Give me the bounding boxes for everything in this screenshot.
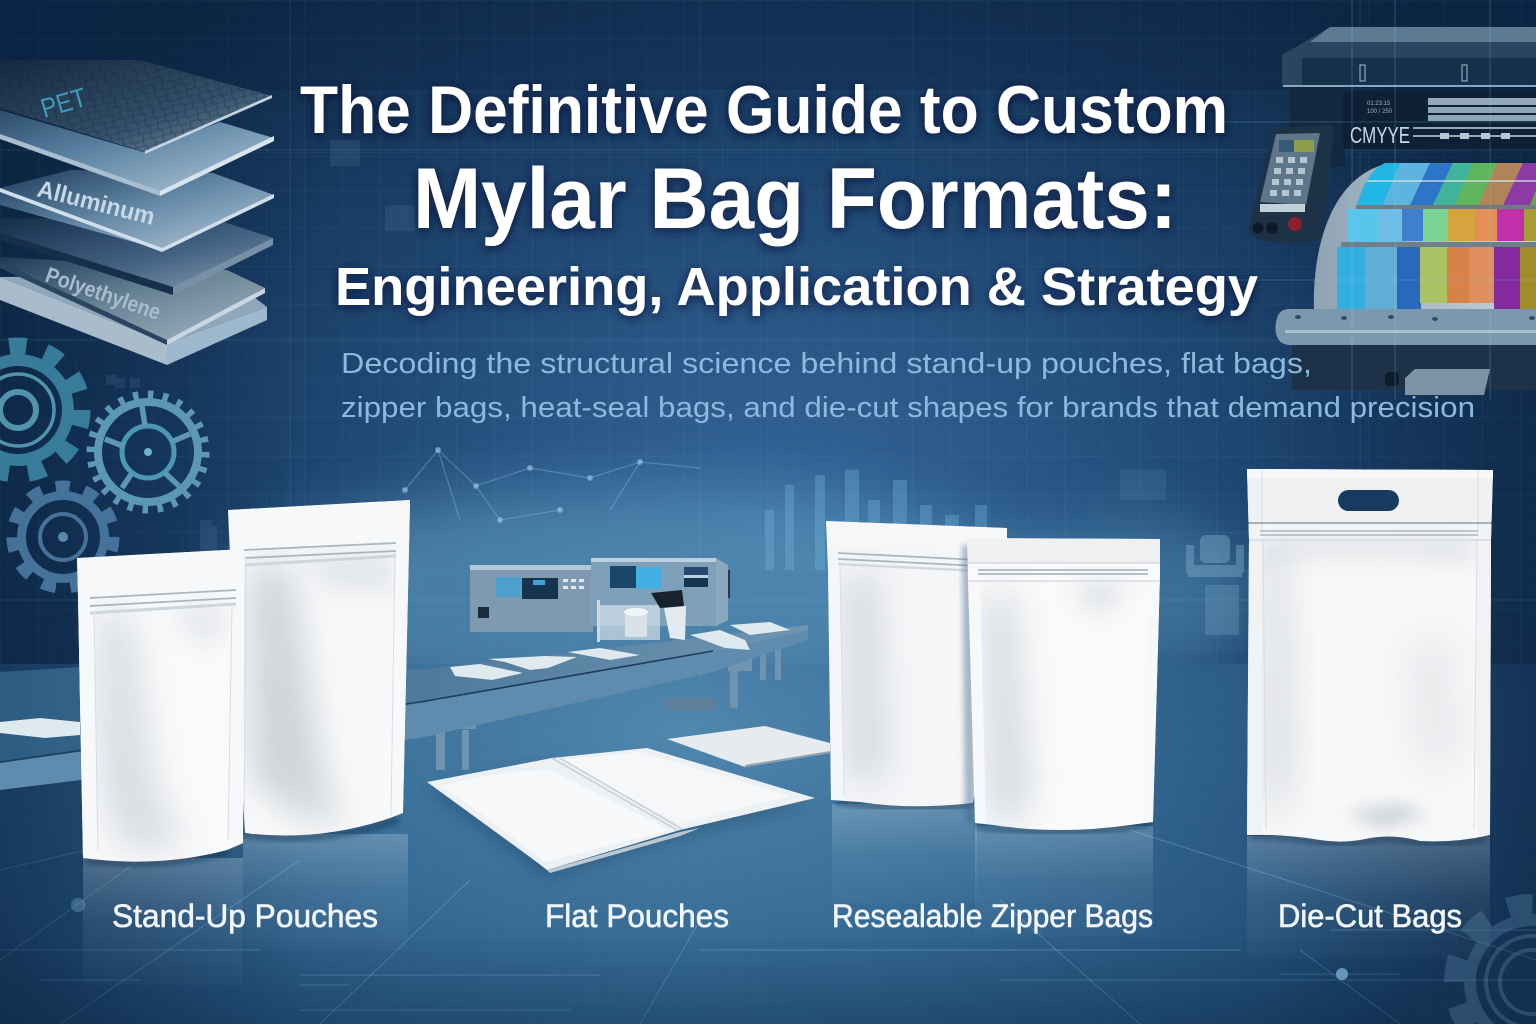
gear: spoked — [91, 395, 205, 509]
front open flat pouch — [427, 748, 815, 873]
title: The Definitive Guide to Custom — [300, 72, 1228, 148]
decorative data network — [402, 448, 700, 522]
production line machine — [0, 558, 808, 790]
handle hole — [1338, 490, 1399, 511]
stand-up pouches — [75, 495, 415, 985]
gears — [0, 346, 205, 587]
clear layer — [0, 110, 274, 196]
color drum — [1314, 163, 1536, 310]
CMYK panel: 01:23:15 — [1367, 101, 1391, 107]
front zipper bag — [960, 535, 1165, 832]
subtitle: zipper bags, heat-seal bags, and die-cut shapes for brands that demand precision — [341, 392, 1475, 424]
polyethylene layer: Polyethylene — [42, 262, 164, 325]
gear: lower — [13, 487, 113, 587]
handheld controller — [1248, 125, 1334, 244]
small stand-up pouch — [75, 545, 247, 865]
title: Engineering, Application & Strategy — [335, 257, 1258, 317]
aluminum layer — [0, 170, 274, 252]
flat pouches — [427, 726, 830, 878]
machine body left — [470, 565, 593, 632]
CMYK panel: CMYYE — [1350, 122, 1410, 148]
PET layer: PET — [37, 82, 90, 124]
pouches on conveyor — [0, 622, 790, 738]
resealable zipper bags — [822, 515, 1165, 936]
title: Mylar Bag Formats: — [413, 151, 1177, 247]
CMYK panel: 100 / 250 — [1367, 109, 1393, 115]
faint bar chart — [765, 470, 987, 570]
aluminum layer: Alluminum — [35, 176, 158, 231]
faint robot icon — [1186, 535, 1244, 635]
large stand-up pouch — [225, 495, 415, 840]
die-cut bag — [1240, 465, 1498, 959]
gear: large — [0, 346, 82, 474]
corner decorative gear — [1454, 904, 1536, 1024]
label: flat pouches: Flat Pouches — [545, 898, 729, 934]
press hood — [1282, 27, 1536, 167]
machine body right — [591, 558, 730, 626]
bag format labels — [112, 898, 1462, 934]
label: die-cut bags: Die-Cut Bags — [1278, 898, 1462, 934]
PET layer — [0, 60, 272, 154]
base layer — [0, 275, 267, 365]
title — [300, 72, 1258, 317]
printing press — [1220, 0, 1536, 400]
rear zipper bag — [822, 515, 1012, 810]
die-cut reflection — [1247, 836, 1490, 959]
label: resealable zipper bags: Resealable Zipper Bags — [832, 898, 1153, 934]
dark layer — [0, 218, 273, 295]
material layers stack — [0, 60, 274, 365]
subtitle: Decoding the structural science behind stand-up pouches, flat bags, — [341, 348, 1312, 380]
label: stand-up pouches: Stand-Up Pouches — [112, 898, 378, 934]
flat pouch shadow — [427, 766, 815, 878]
rear flat pouch — [667, 726, 830, 767]
conveyor belt — [0, 625, 808, 790]
polyethylene layer — [0, 257, 265, 345]
press base — [1276, 309, 1536, 395]
sealing head — [597, 590, 686, 642]
subtitle — [341, 348, 1475, 424]
conveyor legs — [436, 640, 781, 770]
CMYK panel — [1343, 91, 1536, 149]
zipper reflections — [832, 804, 1153, 936]
stand-up reflections — [83, 834, 408, 985]
